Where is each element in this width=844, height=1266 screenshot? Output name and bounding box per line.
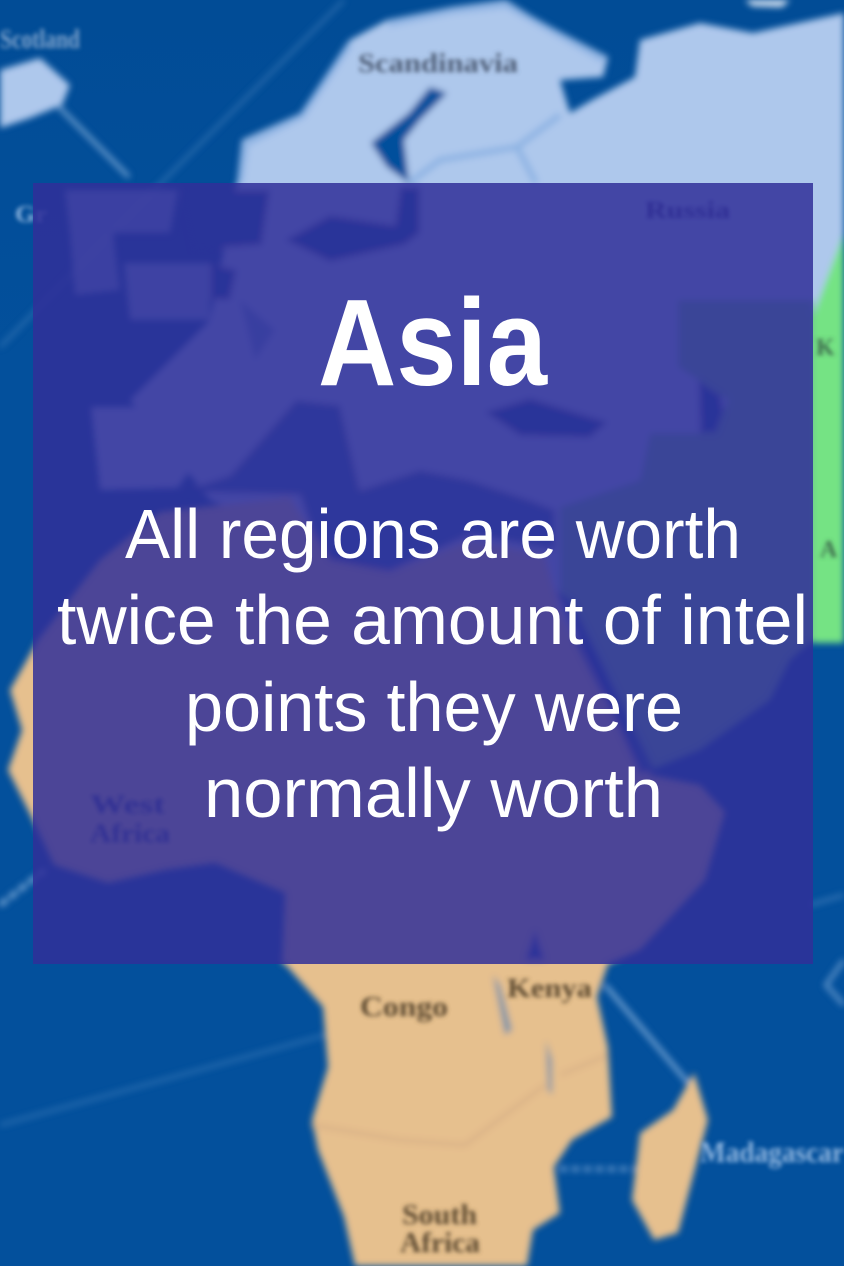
map: blurred place labels: A [820, 537, 838, 563]
map: blurred place labels: South [402, 1200, 477, 1231]
map: Iceland [0, 58, 70, 128]
map: lands under panel [65, 190, 178, 295]
map: blurred place labels: West [90, 790, 165, 819]
map: blurred place labels: Scandinavia [358, 48, 519, 78]
text block: description [57, 495, 808, 832]
map: Gulf of Bothnia [371, 87, 447, 183]
map: Arabia and Middle East green region [560, 300, 813, 772]
map: Africa [8, 497, 725, 1266]
text block: description: twice the amount of intel [57, 581, 808, 659]
map: blurred place labels: Scotland [0, 24, 80, 54]
map: blurred place labels: Congo [360, 991, 448, 1023]
map: Madagascar [632, 1073, 708, 1240]
map: Scandinavia and Russia [130, 0, 844, 640]
map: Central Asia green [813, 233, 844, 643]
map: coast highlight [240, 5, 604, 183]
text block: description: normally worth [204, 754, 663, 832]
map: blurred place labels: K [816, 335, 835, 361]
map: lakes [525, 930, 545, 960]
map: blurred place labels: Russia [645, 198, 730, 224]
text block: description: points they were [185, 668, 683, 746]
panel background [33, 183, 813, 964]
map: European seas [180, 187, 728, 572]
map: Red Sea [555, 590, 655, 775]
text block: description: All regions are worth [125, 495, 741, 573]
map: blurred place labels: Kenya [507, 973, 593, 1003]
map: blurred place labels: Gr [15, 202, 47, 228]
map: blurred place labels: Africa [400, 1228, 480, 1259]
map: faint borders [312, 1055, 608, 1145]
heading: Asia: Asia [318, 275, 548, 412]
map: blurred place labels: Africa [90, 819, 170, 848]
map: Svalbard cap [745, 0, 790, 7]
